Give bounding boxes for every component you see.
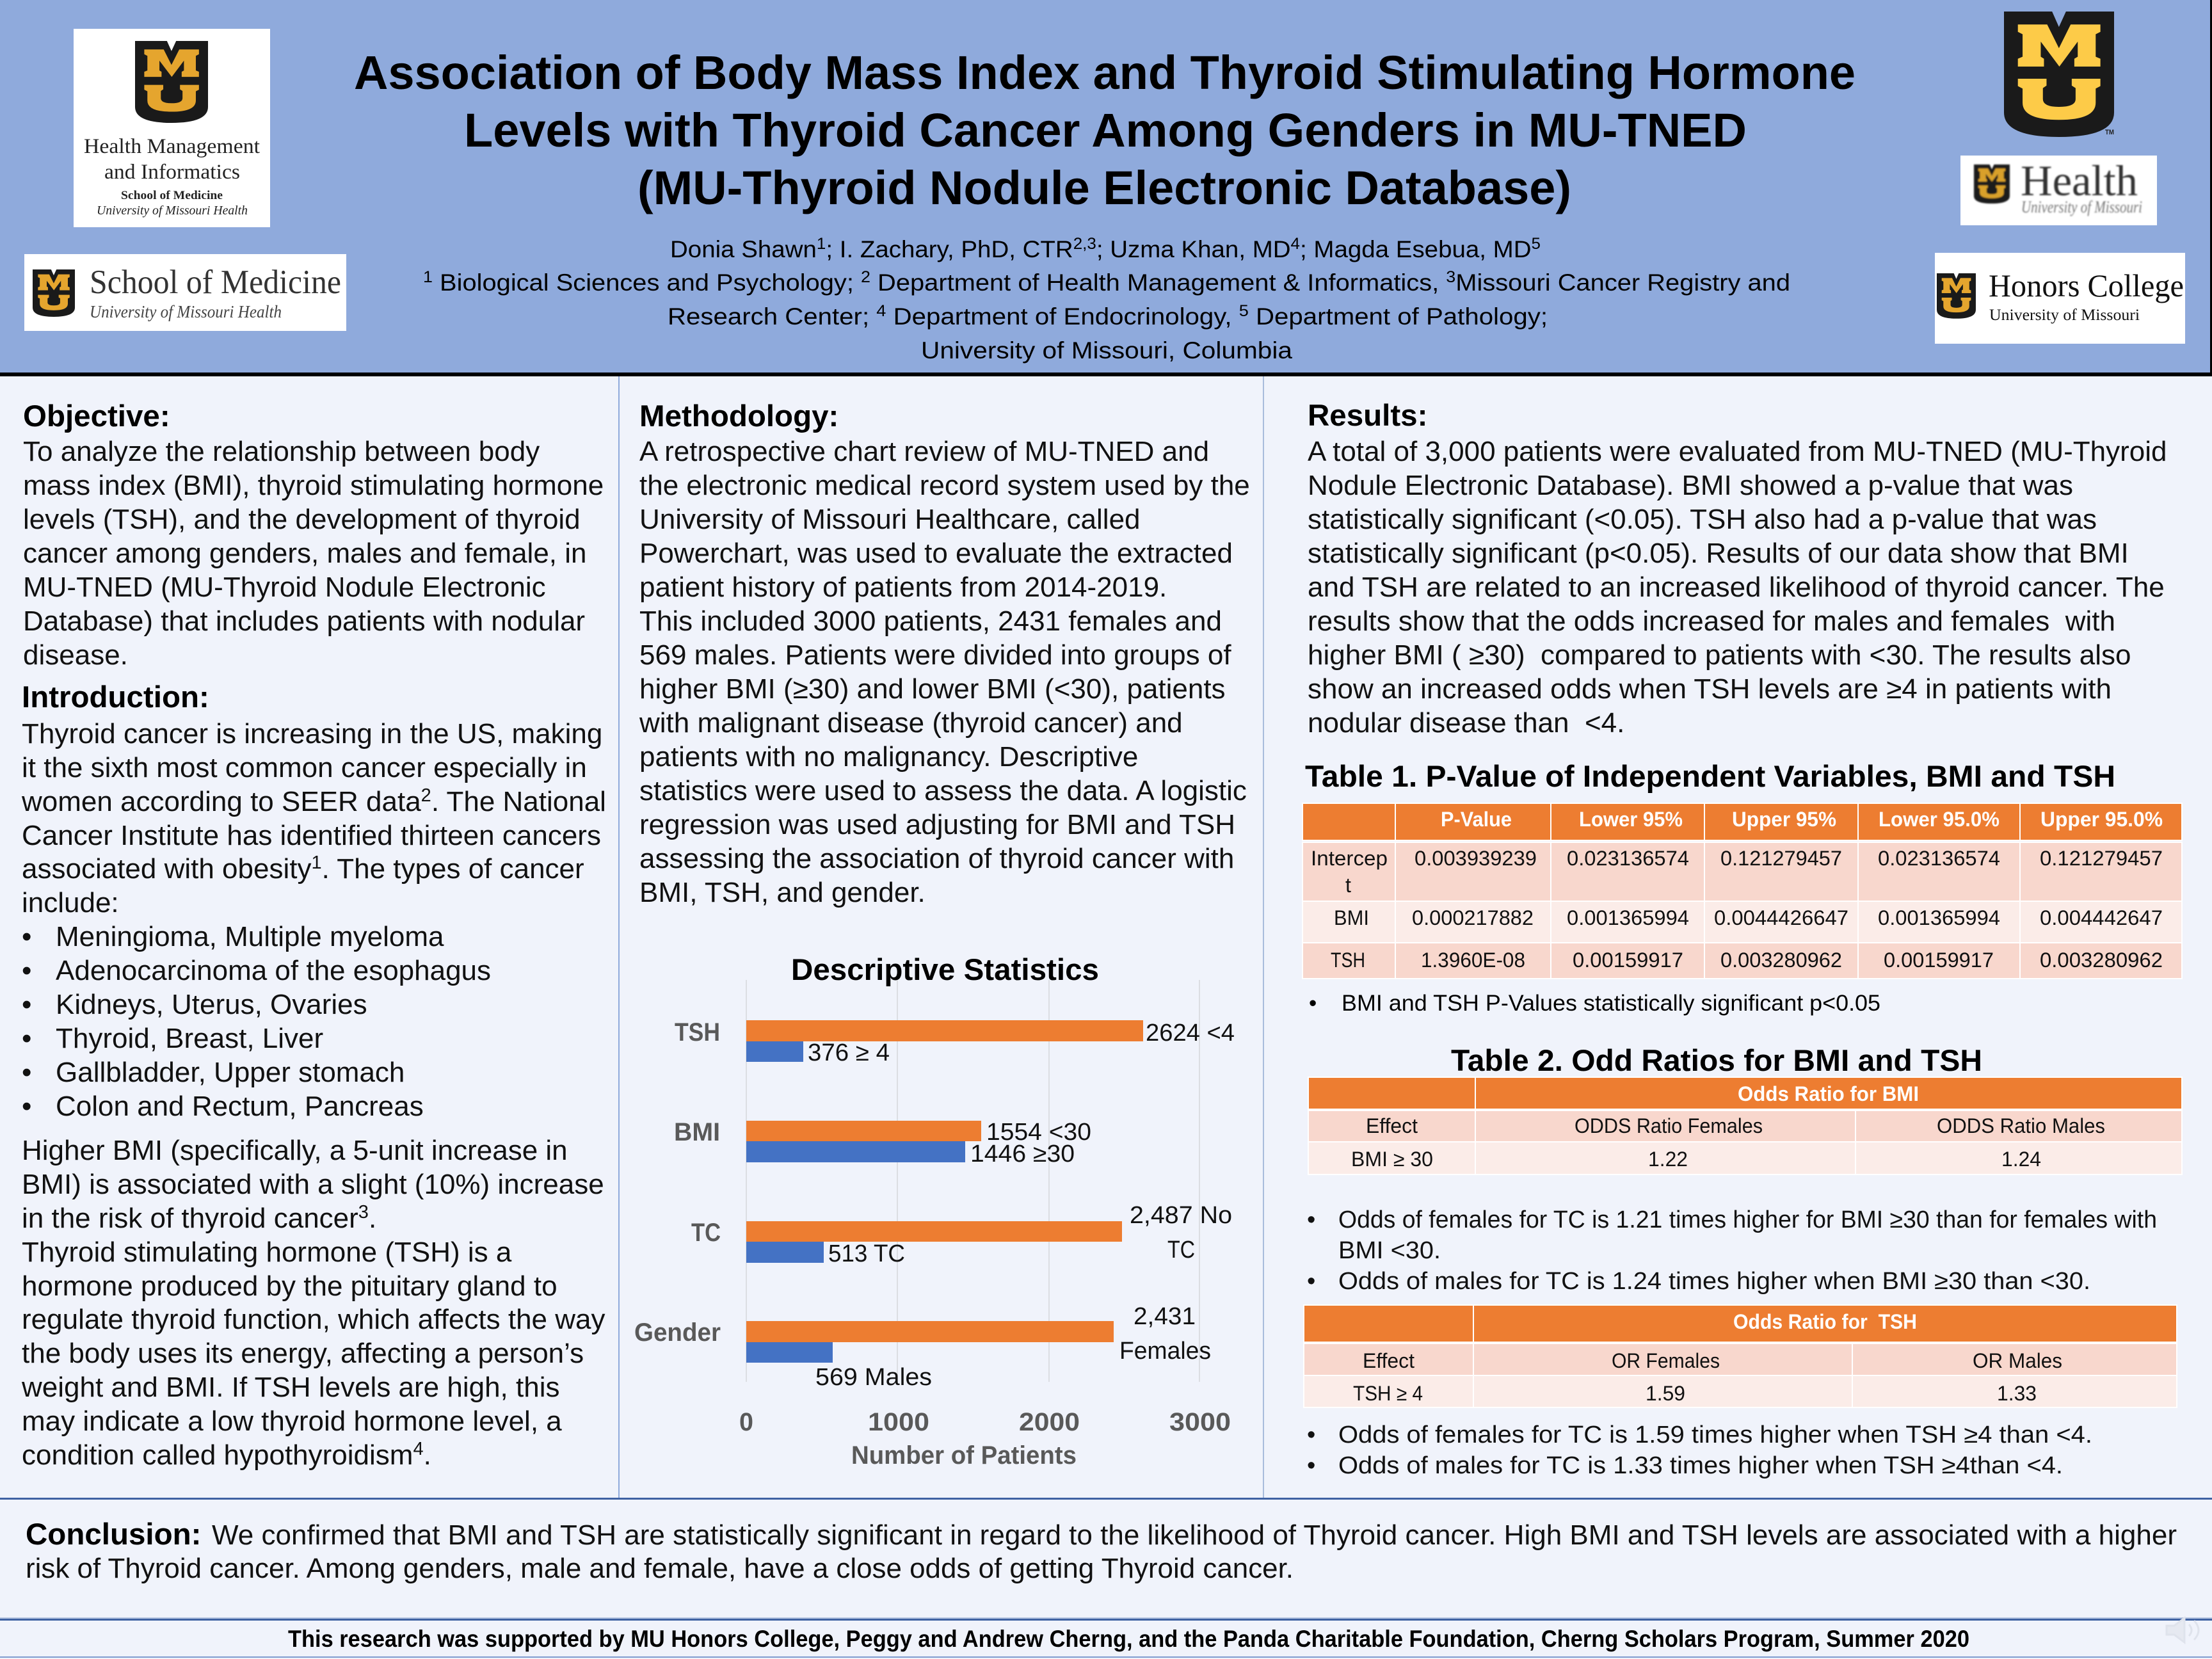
bullets: BMI odds <box>1307 1206 2157 1295</box>
table 1 header text: Lower 95.0% <box>1879 808 2000 831</box>
text block: introduction: 2 <box>421 785 431 806</box>
list: cancer types: • <box>22 1057 31 1088</box>
text block: methodology: A retrospective chart review of MU-TNED and <box>639 436 1209 467</box>
text block: methodology: 569 males. Patients were divided into groups of <box>639 639 1231 671</box>
authors and affiliations: Department of Pathology; <box>1249 303 1548 330</box>
table 2 title: Table 2. Odd Ratios for BMI and TSH <box>1451 1043 1982 1077</box>
table 1 header text: Upper 95.0% <box>2040 808 2163 831</box>
table 1 body text: 0.023136574 <box>1567 847 1689 870</box>
list: cancer types: Thyroid, Breast, Liver <box>56 1023 323 1054</box>
table 1 body text: 0.001365994 <box>1878 906 2000 929</box>
header band <box>0 0 2212 376</box>
authors and affiliations: University of Missouri, Columbia <box>921 337 1292 364</box>
data labels: Females <box>1119 1338 1211 1365</box>
data labels <box>808 1020 1235 1391</box>
table 2a text: Odds Ratio for BMI <box>1738 1082 1919 1105</box>
text block: methodology: higher BMI (≥30) and lower BMI (<30), patients <box>639 673 1226 705</box>
x axis tick labels: 3000 <box>1169 1408 1231 1436</box>
authors and affiliations: ; I. Zachary, PhD, CTR <box>826 236 1073 262</box>
x axis tick labels: 1000 <box>868 1408 929 1436</box>
category labels: TC <box>691 1219 721 1247</box>
table 2b text: 1.59 <box>1646 1382 1685 1405</box>
table 1 body text: TSH <box>1331 949 1365 972</box>
text block: methodology: patient history of patients from 2014-2019. <box>639 572 1167 603</box>
bullets: TSH odds: • <box>1307 1422 1315 1448</box>
panel: results <box>1308 399 2167 739</box>
table 1 body text: t <box>1345 874 1351 897</box>
table 1 body text: 0.00159917 <box>1573 949 1683 972</box>
conclusion text: We confirmed that BMI and TSH are statistically significant in regard to the likelihood of Thyroid cancer. High BMI and TSH levels are associated with a higher <box>212 1519 2177 1551</box>
list: cancer types: Gallbladder, Upper stomach <box>56 1057 405 1088</box>
category labels <box>634 1018 721 1347</box>
text block: introduction: 1 <box>311 853 322 873</box>
authors and affiliations: 1 <box>423 268 433 286</box>
table 1 cells <box>1302 803 2182 979</box>
table 2a cells <box>1308 1077 2182 1174</box>
table 2b text: TSH ≥ 4 <box>1353 1382 1423 1405</box>
logo: Health Management and Informatics: Health Management <box>84 135 260 158</box>
heading: objective: Objective: <box>23 399 170 433</box>
data labels: 569 Males <box>815 1364 932 1391</box>
table 1 header text: P-Value <box>1441 808 1512 831</box>
logo: Honors College: University of Missouri <box>1989 307 2140 324</box>
text block: results: results show that the odds increased for males and females with <box>1308 605 2115 637</box>
logo: Health Management and Informatics: School of Medicine <box>121 189 223 202</box>
logo: MU Health: University of Missouri <box>2021 198 2142 216</box>
logo: Health Management and Informatics: University of Missouri Health <box>97 204 248 218</box>
table 1 body text: 1.3960E-08 <box>1421 949 1525 972</box>
authors and affiliations: Research Center; <box>668 303 853 330</box>
logo: School of Medicine: University of Missouri Health <box>90 302 282 321</box>
table 2a text <box>1351 1082 2105 1171</box>
table 2b text: Effect <box>1363 1349 1415 1372</box>
text block: objective <box>23 436 604 671</box>
text block: methodology: Powerchart, was used to evaluate the extracted <box>639 538 1233 569</box>
text block: objective: MU-TNED (MU-Thyroid Nodule Electronic <box>23 572 546 603</box>
table 1 header text <box>1441 808 2163 831</box>
text block: results: show an increased odds when TSH levels are ≥4 in patients with <box>1308 673 2112 705</box>
title: (MU-Thyroid Nodule Electronic Database) <box>637 161 1571 214</box>
list: cancer types <box>22 921 491 1122</box>
table 1 body text: 0.003939239 <box>1415 847 1537 870</box>
table 2b text <box>1353 1310 2062 1405</box>
table 1 body text: 0.001365994 <box>1567 906 1689 929</box>
authors and affiliations: 4 <box>876 302 886 320</box>
text block: BMI and TSH background: 4 <box>413 1439 424 1459</box>
table 1 body text: BMI <box>1334 906 1369 929</box>
text block: results <box>1308 436 2167 739</box>
list: cancer types: Kidneys, Uterus, Ovaries <box>56 989 367 1020</box>
logo: MU Health <box>1960 156 2157 225</box>
text block: BMI and TSH background: BMI) is associated with a slight (10%) increase <box>22 1169 604 1200</box>
list: cancer types: Adenocarcinoma of the esophagus <box>56 955 491 986</box>
logo: Health Management and Informatics <box>74 29 270 227</box>
list: cancer types: • <box>22 955 31 986</box>
authors and affiliations: Department of Endocrinology, <box>886 303 1239 330</box>
list: cancer types: • <box>22 1023 31 1054</box>
table 2b text: 1.33 <box>1997 1382 2037 1405</box>
table 1 body text: 0.004442647 <box>2040 906 2163 929</box>
text block: BMI and TSH background: may indicate a low thyroid hormone level, a <box>22 1406 562 1437</box>
list: cancer types: Meningioma, Multiple myeloma <box>56 921 444 952</box>
table 2a: odds ratio for BMI <box>1308 1077 2182 1174</box>
x axis tick labels: 0 <box>739 1408 753 1436</box>
bullets: TSH odds: Odds of males for TC is 1.33 times higher when TSH ≥4than <4. <box>1338 1452 2063 1479</box>
text block: introduction <box>21 718 606 918</box>
authors and affiliations: 5 <box>1239 302 1249 320</box>
bar chart: descriptive statistics <box>634 952 1235 1470</box>
bullets: BMI odds: • <box>1307 1206 1315 1233</box>
text block: BMI and TSH background: in the risk of thyroid cancer <box>22 1203 358 1234</box>
table 1 body text: 0.0044426647 <box>1714 906 1848 929</box>
text block: introduction: . The National <box>431 786 606 817</box>
text block: introduction: Cancer Institute has identified thirteen cancers <box>22 820 601 851</box>
x axis tick labels: 2000 <box>1019 1408 1080 1436</box>
bars <box>746 1020 1143 1363</box>
data labels: 2,431 <box>1134 1303 1196 1330</box>
data labels: 513 TC <box>828 1240 905 1267</box>
note: table 1 significance: • <box>1309 991 1317 1016</box>
text block: BMI and TSH background: condition called hypothyroidism <box>22 1439 413 1471</box>
bullets: BMI odds: Odds of males for TC is 1.24 times higher when BMI ≥30 than <30. <box>1338 1268 2090 1295</box>
table 1 body text: Intercep <box>1311 847 1388 870</box>
text block: results: Nodule Electronic Database). BMI showed a p-value that was <box>1308 470 2073 501</box>
table 2b text: Odds Ratio for TSH <box>1733 1310 1917 1333</box>
logo: Honors College <box>1935 253 2185 344</box>
text block: methodology: with malignant disease (thyroid cancer) and <box>639 707 1183 739</box>
heading: introduction: Introduction: <box>22 680 209 714</box>
text block: results: higher BMI ( ≥30) compared to patients with <30. The results also <box>1308 639 2131 671</box>
text block: methodology <box>639 436 1250 908</box>
text block: BMI and TSH background: Higher BMI (specifically, a 5-unit increase in <box>22 1135 568 1166</box>
table 1 body text: 0.023136574 <box>1878 847 2000 870</box>
authors and affiliations: ; Magda Esebua, MD <box>1300 236 1532 262</box>
text block: results: statistically significant (p<0.05). Results of our data show that BMI <box>1308 538 2129 569</box>
text block: introduction: women according to SEER data <box>22 786 421 817</box>
text block: BMI and TSH background: . <box>369 1203 376 1234</box>
logo: Honors College: Honors College <box>1989 268 2184 303</box>
data labels: 1446 ≥30 <box>970 1141 1075 1167</box>
text block: BMI and TSH background <box>21 1135 605 1471</box>
category labels: BMI <box>674 1118 720 1146</box>
chart title: Descriptive Statistics <box>791 952 1099 986</box>
panel: conclusion <box>26 1518 2177 1584</box>
authors and affiliations: 4 <box>1291 235 1300 253</box>
note: table 1 significance: BMI and TSH P-Values statistically significant p<0.05 <box>1342 991 1880 1016</box>
authors and affiliations: 2 <box>861 268 870 286</box>
text block: BMI and TSH background: hormone produced by the pituitary gland to <box>22 1270 557 1302</box>
table 2a text: 1.22 <box>1648 1148 1688 1171</box>
authors and affiliations: ; Uzma Khan, MD <box>1096 236 1291 262</box>
text block: methodology: statistics were used to assess the data. A logistic <box>639 775 1247 806</box>
table 1 title: Table 1. P-Value of Independent Variables, BMI and TSH <box>1305 759 2115 793</box>
authors and affiliations: 1 <box>817 235 826 253</box>
data labels: 2624 <4 <box>1146 1020 1235 1046</box>
table 2a text: BMI ≥ 30 <box>1351 1148 1433 1171</box>
bullets: BMI odds: • <box>1307 1268 1315 1295</box>
text block: BMI and TSH background: the body uses its energy, affecting a person’s <box>22 1338 584 1369</box>
table 2b text: OR Males <box>1973 1349 2062 1372</box>
table 2b text: OR Females <box>1612 1349 1720 1372</box>
authors and affiliations <box>423 235 1790 364</box>
authors and affiliations: Biological Sciences and Psychology; <box>433 269 861 296</box>
text block: introduction: associated with obesity <box>22 853 311 885</box>
logo: MU shield: TM <box>2105 129 2114 136</box>
title: Association of Body Mass Index and Thyroid Stimulating Hormone <box>354 46 1855 99</box>
heading: results: Results: <box>1308 399 1427 433</box>
category labels: Gender <box>634 1318 721 1347</box>
table 2a text: ODDS Ratio Females <box>1575 1114 1763 1137</box>
text block: methodology: BMI, TSH, and gender. <box>639 877 926 908</box>
text block: objective: disease. <box>23 639 128 671</box>
heading: methodology: Methodology: <box>639 399 838 433</box>
table 1 header text: Lower 95% <box>1579 808 1683 831</box>
table 2b: odds ratio for TSH <box>1304 1305 2177 1407</box>
title <box>354 46 1855 214</box>
conclusion text: risk of Thyroid cancer. Among genders, male and female, have a close odds of getting Thyroid cancer. <box>26 1553 1294 1584</box>
text block: objective: To analyze the relationship between body <box>23 436 540 467</box>
table 2a text: Effect <box>1366 1114 1418 1137</box>
authors and affiliations: Department of Health Management & Informatics, <box>870 269 1446 296</box>
text block: objective: cancer among genders, males and female, in <box>23 538 586 569</box>
column dividers and rules <box>0 376 2212 1658</box>
footer acknowledgement: This research was supported by MU Honors College, Peggy and Andrew Cherng, and the Panda Charitable Foundation, Cherng Scholars Program, Summer 2020 <box>288 1626 1969 1652</box>
table 1 body text: 0.003280962 <box>1720 949 1842 972</box>
authors and affiliations: 5 <box>1532 235 1541 253</box>
table 1 body text: 0.00159917 <box>1884 949 1994 972</box>
text block: results: and TSH are related to an increased likelihood of thyroid cancer. The <box>1308 572 2165 603</box>
text block: results: nodular disease than <4. <box>1308 707 1624 739</box>
text block: objective: mass index (BMI), thyroid stimulating hormone <box>23 470 604 501</box>
table 2a text: 1.24 <box>2001 1148 2041 1171</box>
text block: methodology: This included 3000 patients, 2431 females and <box>639 605 1222 637</box>
text block: introduction: . The types of cancer <box>322 853 584 885</box>
text block: results: A total of 3,000 patients were evaluated from MU-TNED (MU-Thyroid <box>1308 436 2167 467</box>
x axis title: Number of Patients <box>851 1441 1077 1470</box>
gridlines <box>746 980 1199 1382</box>
authors and affiliations: 2,3 <box>1073 235 1096 253</box>
data labels: 2,487 No <box>1130 1202 1232 1229</box>
x axis tick labels <box>739 1408 1231 1436</box>
list: cancer types: • <box>22 989 31 1020</box>
authors and affiliations: Missouri Cancer Registry and <box>1455 269 1790 296</box>
panel: methodology <box>639 399 1250 908</box>
logo: MU shield <box>2004 12 2114 137</box>
text block: methodology: University of Missouri Healthcare, called <box>639 504 1141 535</box>
table 1: p-values <box>1302 803 2182 979</box>
text block: objective: Database) that includes patients with nodular <box>23 605 585 637</box>
bullets: BMI odds: Odds of females for TC is 1.21 times higher for BMI ≥30 than for females with <box>1338 1206 2157 1233</box>
data labels: 376 ≥ 4 <box>808 1039 890 1066</box>
text block: introduction: include: <box>22 887 119 918</box>
table 1 body text: 0.121279457 <box>1720 847 1842 870</box>
text block: methodology: the electronic medical record system used by the <box>639 470 1250 501</box>
data labels: 1554 <30 <box>986 1119 1091 1146</box>
authors and affiliations: Donia Shawn <box>670 236 811 262</box>
authors and affiliations: 3 <box>1446 268 1455 286</box>
bullets: TSH odds: • <box>1307 1452 1315 1479</box>
text block: methodology: patients with no malignancy. Descriptive <box>639 741 1138 773</box>
text block: BMI and TSH background: Thyroid stimulating hormone (TSH) is a <box>22 1237 512 1268</box>
text block: BMI and TSH background: weight and BMI. If TSH levels are high, this <box>21 1372 559 1403</box>
text block: results: statistically significant (<0.05). TSH also had a p-value that was <box>1308 504 2097 535</box>
logo: School of Medicine: School of Medicine <box>90 264 341 301</box>
text block: methodology: regression was used adjusting for BMI and TSH <box>639 809 1235 840</box>
conclusion text <box>26 1519 2177 1584</box>
table 2b cells <box>1304 1305 2177 1407</box>
text block: introduction: Thyroid cancer is increasing in the US, making <box>22 718 602 749</box>
logo: Health Management and Informatics: and Informatics <box>104 161 240 184</box>
text block: methodology: assessing the association of thyroid cancer with <box>639 843 1234 874</box>
icon: speaker <box>2167 1618 2199 1642</box>
bullets: TSH odds <box>1307 1422 2092 1479</box>
conclusion heading: Conclusion: <box>26 1518 201 1551</box>
category labels: TSH <box>675 1018 720 1046</box>
table 1 body text: 0.003280962 <box>2040 949 2163 972</box>
text block: BMI and TSH background: 3 <box>358 1202 369 1222</box>
table 1 body text: 0.121279457 <box>2040 847 2163 870</box>
text block: introduction: it the sixth most common cancer especially in <box>22 752 587 783</box>
logo: School of Medicine <box>24 254 346 331</box>
text block: objective: levels (TSH), and the development of thyroid <box>23 504 581 535</box>
table 1 body text: 0.000217882 <box>1412 906 1534 929</box>
table 1 header text: Upper 95% <box>1732 808 1836 831</box>
panel: objective and introduction <box>21 399 606 1471</box>
logo: MU Health: Health <box>2021 156 2138 205</box>
text block: BMI and TSH background: . <box>424 1439 431 1471</box>
list: cancer types: • <box>22 921 31 952</box>
bullets: TSH odds: Odds of females for TC is 1.59 times higher when TSH ≥4 than <4. <box>1338 1422 2092 1448</box>
table 1 body text <box>1311 847 2163 972</box>
text block: BMI and TSH background: regulate thyroid function, which affects the way <box>22 1304 605 1335</box>
title: Levels with Thyroid Cancer Among Genders in MU-TNED <box>464 104 1747 157</box>
list: cancer types: • <box>22 1091 31 1122</box>
data labels: TC <box>1167 1237 1195 1263</box>
bullets: BMI odds: BMI <30. <box>1338 1237 1441 1264</box>
table 2a text: ODDS Ratio Males <box>1937 1114 2105 1137</box>
list: cancer types: Colon and Rectum, Pancreas <box>56 1091 424 1122</box>
